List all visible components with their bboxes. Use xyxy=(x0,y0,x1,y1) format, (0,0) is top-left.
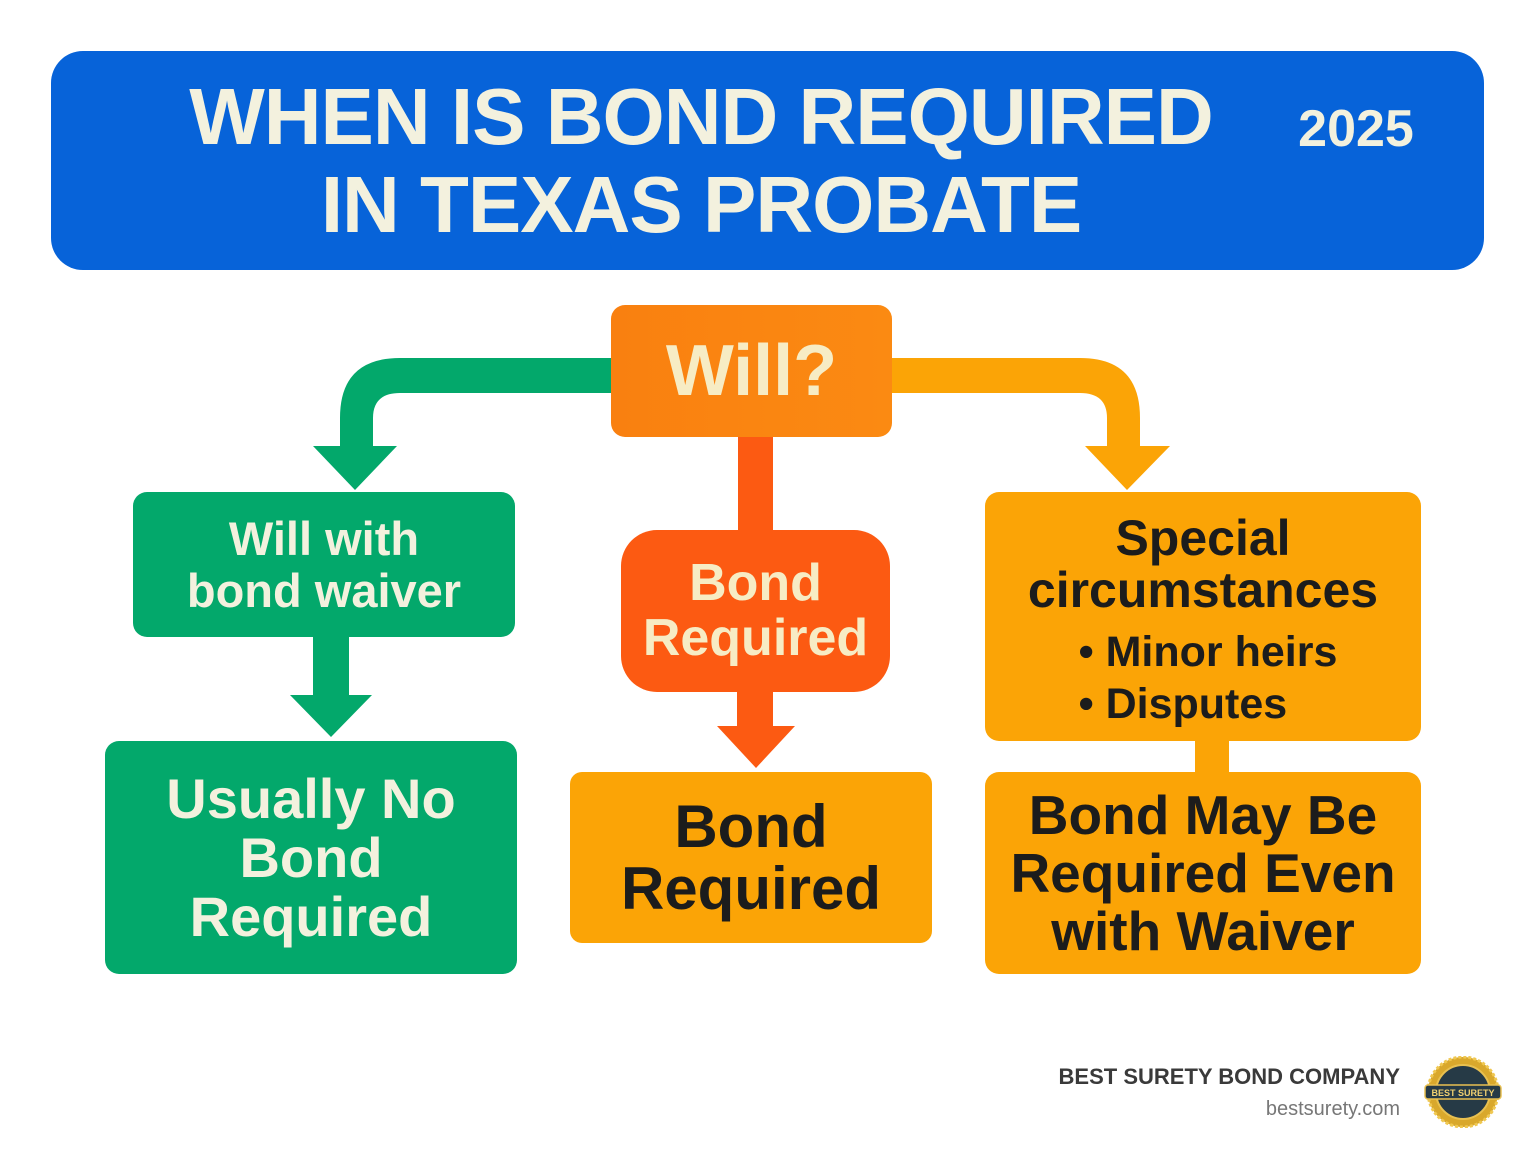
footer brand xyxy=(1059,1064,1400,1120)
node: will with bond waiver: bond waiver xyxy=(187,564,461,616)
bullets: • Disputes xyxy=(1079,680,1287,728)
node: bond required red: Bond xyxy=(689,554,822,612)
node: usually no bond required: Usually No xyxy=(166,767,456,830)
header banner xyxy=(51,51,1484,270)
title: IN TEXAS PROBATE xyxy=(321,160,1081,249)
icon: seal xyxy=(1424,1056,1502,1128)
node: Will?: Will? xyxy=(666,331,837,411)
node: usually no bond required xyxy=(105,741,517,974)
year: 2025 xyxy=(1298,100,1414,158)
arrow: orange to right xyxy=(890,358,1170,490)
bullets: • Minor heirs xyxy=(1079,628,1337,676)
node: bond required amber: Required xyxy=(621,854,881,922)
title xyxy=(189,72,1213,249)
node: bond may be required: Required Even xyxy=(1010,842,1396,904)
arrow: green down xyxy=(290,636,372,737)
connector: right xyxy=(1195,739,1229,774)
arrow: green to left xyxy=(313,358,612,490)
node: Will? xyxy=(611,305,892,437)
node: bond may be required: with Waiver xyxy=(1051,900,1355,962)
icon: seal: BEST SURETY xyxy=(1431,1088,1495,1098)
title: WHEN IS BOND REQUIRED xyxy=(189,72,1213,161)
arrow: red down xyxy=(717,690,795,768)
bullets xyxy=(1079,628,1337,728)
node: bond may be required xyxy=(985,772,1421,974)
node: bond required red: Required xyxy=(643,609,868,667)
node: bond required red xyxy=(621,530,890,692)
node: will with bond waiver xyxy=(133,492,515,637)
node: special circumstances xyxy=(985,492,1421,741)
node: usually no bond required: Bond xyxy=(239,826,383,889)
node: usually no bond required: Required xyxy=(190,885,432,948)
footer brand: BEST SURETY BOND COMPANY xyxy=(1059,1064,1400,1089)
node: bond required amber xyxy=(570,772,932,943)
node: special circumstances: circumstances xyxy=(1028,562,1378,618)
node: will with bond waiver: Will with xyxy=(229,512,419,564)
arrow: center stem xyxy=(738,436,773,532)
node: bond may be required: Bond May Be xyxy=(1029,784,1377,846)
footer brand: bestsurety.com xyxy=(1266,1098,1400,1120)
node: bond required amber: Bond xyxy=(674,792,828,860)
node: special circumstances: Special xyxy=(1115,510,1291,566)
